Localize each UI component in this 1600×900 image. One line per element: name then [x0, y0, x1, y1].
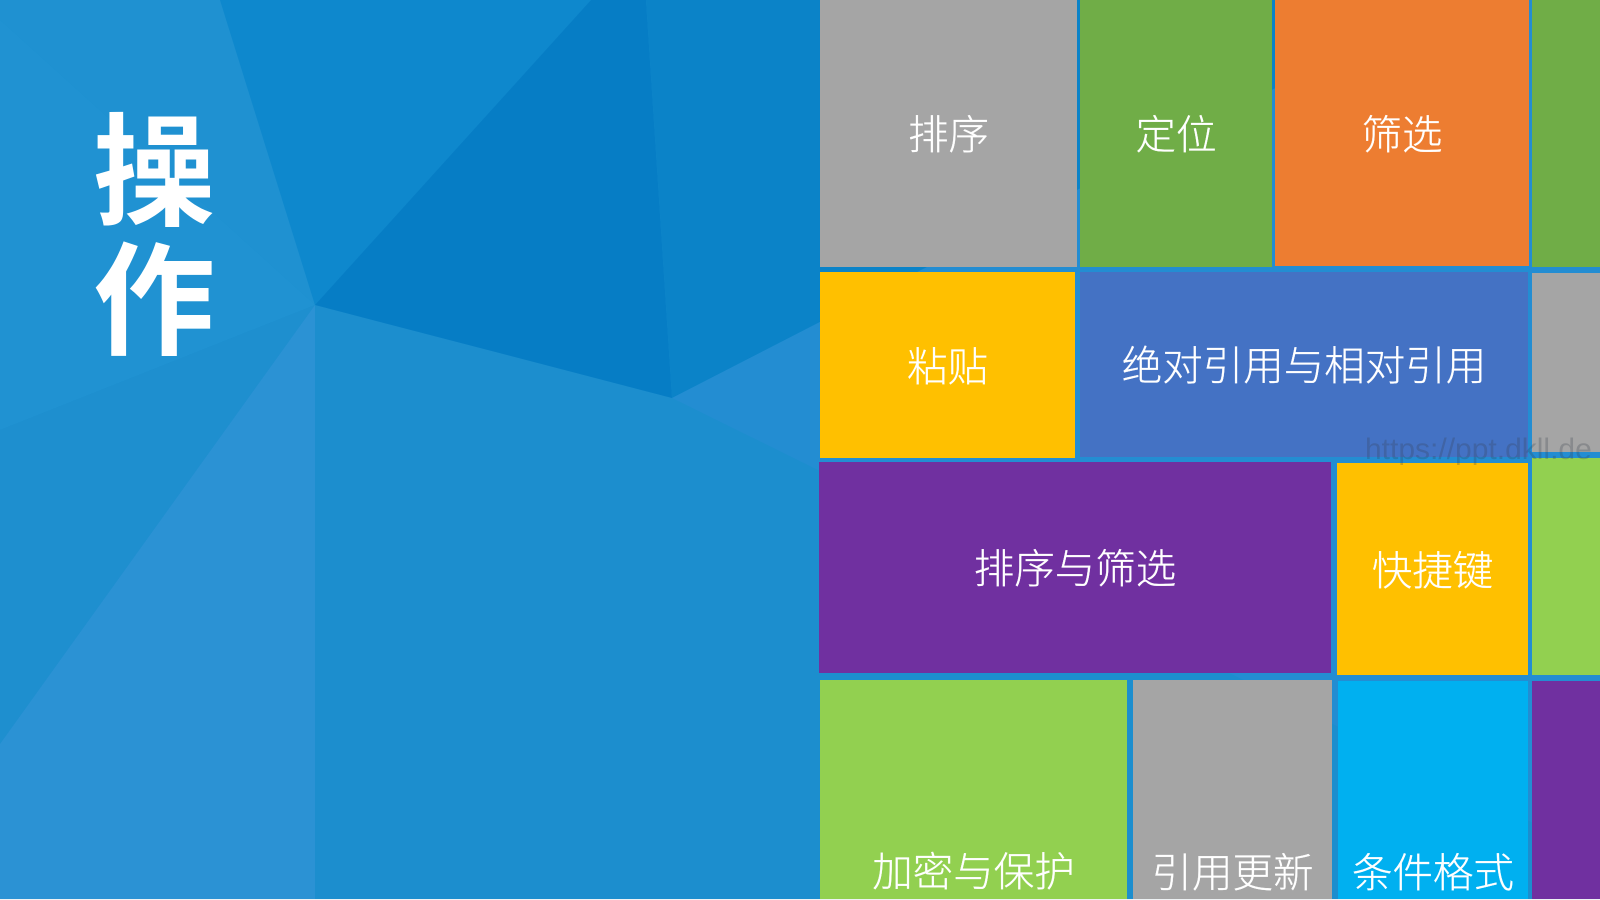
tile: 绝对引用与相对引用: 绝对引用与相对引用 [1122, 342, 1486, 388]
tile: 筛选 [1275, 0, 1529, 266]
tile: purple edge bottom right [1532, 681, 1600, 900]
tile: 快捷键: 快捷键 [1372, 548, 1493, 594]
title [93, 106, 215, 371]
tile: 条件格式: 条件格式 [1352, 850, 1514, 896]
tile: 绝对引用与相对引用 [1080, 272, 1528, 457]
tile: light green edge right [1532, 458, 1600, 675]
tile: 条件格式 [1338, 681, 1528, 900]
tile: 加密与保护 [820, 680, 1127, 900]
tile: 排序与筛选: 排序与筛选 [974, 546, 1176, 592]
title: 操 [93, 106, 215, 242]
watermark: https://ppt.dkll.de [1365, 433, 1592, 466]
tile: 引用更新 [1133, 680, 1332, 900]
tile: green edge top right [1532, 0, 1600, 267]
tile: 定位 [1080, 0, 1272, 267]
tile: 快捷键 [1337, 463, 1528, 675]
title: 作 [93, 235, 215, 371]
tile: grey edge right [1532, 273, 1600, 452]
tile: 排序 [820, 0, 1077, 267]
tile: 加密与保护: 加密与保护 [872, 849, 1075, 895]
tile: 粘贴: 粘贴 [907, 344, 988, 390]
tile: 粘贴 [820, 272, 1075, 458]
tile: 排序与筛选 [819, 462, 1331, 673]
tile: 引用更新: 引用更新 [1152, 850, 1314, 896]
tile: 筛选: 筛选 [1362, 112, 1442, 158]
tile: 定位: 定位 [1136, 112, 1216, 158]
tile: 排序: 排序 [908, 112, 989, 158]
